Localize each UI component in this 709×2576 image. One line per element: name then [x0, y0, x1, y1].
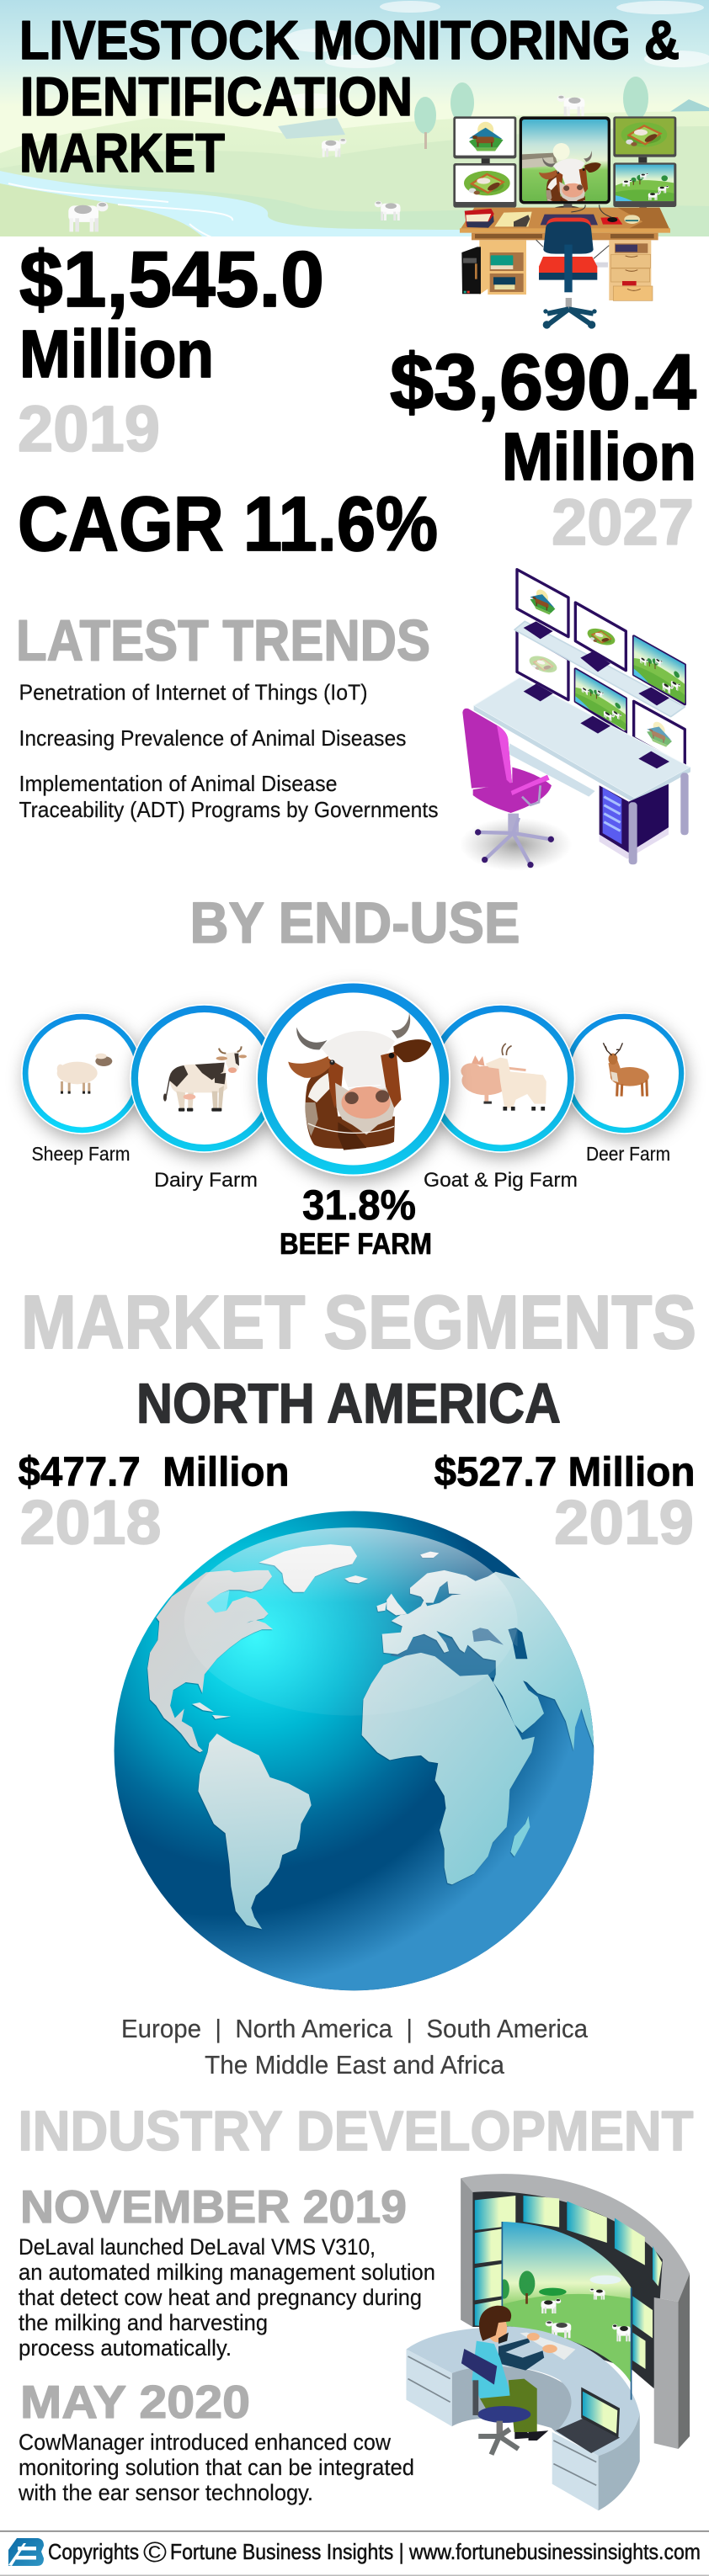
heading: north america: NORTH AMERICA	[136, 1372, 561, 1436]
value: north america 2019: $527.7 Million	[434, 1449, 696, 1495]
footer: Copyrights	[48, 2539, 139, 2564]
labels: end-use segments	[32, 1143, 670, 1192]
value 2019	[18, 235, 324, 465]
heading: november 2019: NOVEMBER 2019	[20, 2180, 407, 2233]
circle: sheep farm	[22, 1013, 142, 1134]
value 2027: $3,690.4	[390, 337, 696, 426]
text: regions	[121, 2014, 589, 2079]
list: trends: Implementation of Animal Disease	[19, 771, 337, 796]
text: november 2019 development: an automated milking management solution	[19, 2260, 435, 2285]
chart: globe	[115, 1511, 601, 1990]
list: trends: Traceability (ADT) Programs by Governments	[19, 797, 438, 822]
value: north america 2019: 2019	[554, 1488, 694, 1557]
CAGR: CAGR 11.6%	[18, 481, 438, 567]
callout: beef farm share	[280, 1182, 432, 1261]
footer	[0, 2531, 709, 2576]
value: north america 2019	[434, 1449, 696, 1557]
heading: may 2020: MAY 2020	[20, 2376, 250, 2428]
list: trends	[19, 680, 438, 822]
circle: dairy farm	[131, 1005, 278, 1152]
illustration: isometric monitoring desk	[460, 570, 690, 871]
text: may 2020 development: with the ear sensor technology.	[18, 2480, 313, 2505]
value 2019: 2019	[18, 393, 160, 465]
callout: beef farm share: 31.8%	[302, 1182, 416, 1229]
labels: end-use segments: Sheep Farm	[32, 1143, 130, 1165]
circle: goat and pig farm	[428, 1005, 574, 1152]
labels: end-use segments: Dairy Farm	[154, 1169, 258, 1192]
labels: end-use segments: Deer Farm	[586, 1143, 670, 1165]
value 2027	[390, 337, 696, 559]
text: may 2020 development	[18, 2430, 414, 2505]
value 2019: Million	[19, 316, 214, 391]
title: MARKET	[19, 122, 225, 183]
labels: end-use segments: Goat & Pig Farm	[424, 1169, 578, 1192]
title: IDENTIFICATION	[20, 66, 413, 127]
circle: beef farm	[257, 983, 450, 1175]
value 2027: Million	[502, 419, 696, 494]
text: regions: Europe | North America | South America	[121, 2014, 589, 2043]
text: may 2020 development: CowManager introduced enhanced cow	[19, 2430, 391, 2455]
text: november 2019 development: that detect cow heat and pregnancy during	[19, 2285, 422, 2310]
illustration: office desk with monitors	[453, 116, 676, 329]
panel: header banner	[0, 0, 709, 249]
text: may 2020 development: monitoring solution that can be integrated	[19, 2455, 414, 2480]
text: november 2019 development	[19, 2234, 435, 2361]
icon: fortune business insights logo	[8, 2538, 44, 2566]
value: north america 2018: $477.7 Million	[19, 1449, 290, 1495]
value 2027: 2027	[552, 486, 694, 559]
heading: by end-use: BY END-USE	[190, 890, 520, 955]
title	[19, 9, 680, 183]
callout: beef farm share: BEEF FARM	[280, 1228, 432, 1261]
value: north america 2018: 2018	[20, 1488, 162, 1557]
text: november 2019 development: process automatically.	[19, 2335, 232, 2361]
chart: end-use circles	[22, 983, 685, 1175]
text: regions: The Middle East and Africa	[205, 2050, 505, 2079]
text: november 2019 development: DeLaval launched DeLaval VMS V310,	[19, 2234, 376, 2260]
list: trends: Increasing Prevalence of Animal Diseases	[19, 725, 406, 751]
value 2019: $1,545.0	[19, 235, 324, 323]
illustration: operator at curved control desk	[406, 2174, 690, 2510]
heading: latest trends: LATEST TRENDS	[16, 608, 430, 673]
circle: deer farm	[564, 1013, 685, 1134]
list: trends: Penetration of Internet of Things (IoT)	[19, 680, 367, 705]
value: north america 2018	[19, 1449, 290, 1557]
footer: ©	[143, 2536, 167, 2568]
text: november 2019 development: the milking and harvesting	[19, 2310, 268, 2335]
